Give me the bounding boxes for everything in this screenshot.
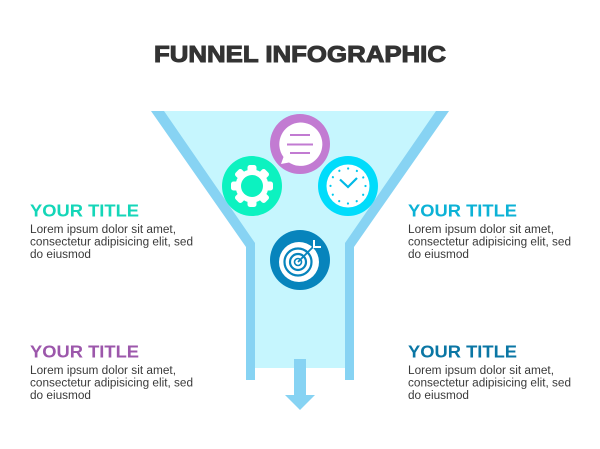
text block: bottom right: Lorem ipsum dolor sit amet, (408, 365, 554, 377)
text block: bottom right: do eiusmod (408, 390, 469, 402)
arrow (285, 359, 315, 410)
text block: bottom left: do eiusmod (30, 390, 91, 402)
text block: bottom left (30, 342, 193, 402)
text block: top right (408, 200, 571, 261)
text block: top left: Lorem ipsum dolor sit amet, (30, 224, 176, 236)
title: FUNNEL INFOGRAPHIC (154, 41, 446, 67)
text block: top right: YOUR TITLE (408, 200, 517, 220)
text block: top right: Lorem ipsum dolor sit amet, (408, 224, 554, 236)
text block: top right: consectetur adipisicing elit, sed (408, 236, 571, 248)
text block: top left (30, 200, 193, 261)
funnel (151, 111, 449, 380)
funnel fill (158, 111, 443, 368)
text block: bottom left: YOUR TITLE (30, 342, 139, 362)
text block: top left: consectetur adipisicing elit, sed (30, 236, 193, 248)
funnel right wall (345, 111, 449, 380)
text block: top left: do eiusmod (30, 249, 91, 261)
text block: bottom left: Lorem ipsum dolor sit amet, (30, 365, 176, 377)
icon: clock (318, 156, 378, 216)
text block: bottom right: consectetur adipisicing elit, sed (408, 378, 571, 390)
text block: bottom left: consectetur adipisicing elit, sed (30, 378, 193, 390)
icon: speech bubble (270, 114, 330, 174)
text block: bottom right: YOUR TITLE (408, 342, 517, 362)
icon: target (270, 230, 330, 290)
funnel left wall (151, 111, 255, 380)
text block: top right: do eiusmod (408, 249, 469, 261)
text block: bottom right (408, 342, 571, 402)
text block: top left: YOUR TITLE (30, 200, 139, 220)
icon: gear (222, 156, 282, 216)
